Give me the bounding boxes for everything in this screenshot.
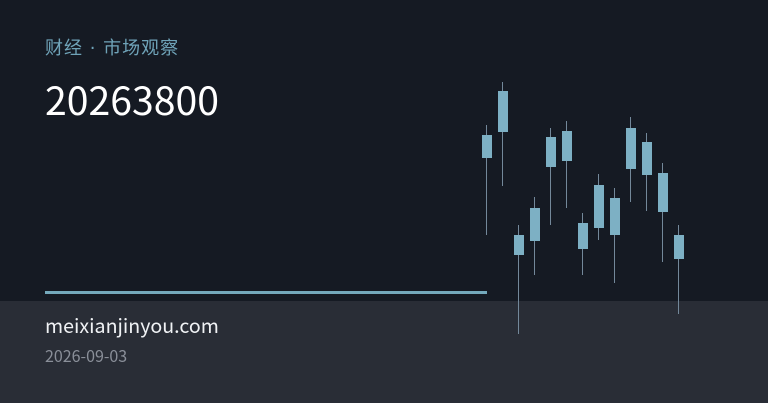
main number heading: 20263800: [45, 71, 219, 127]
accent line: [45, 291, 487, 294]
category label: 财经 · 市场观察: [45, 38, 179, 59]
site domain: meixianjinyou.com: [45, 310, 219, 339]
footer band: [0, 301, 768, 403]
date: 2026-09-03: [45, 343, 127, 367]
